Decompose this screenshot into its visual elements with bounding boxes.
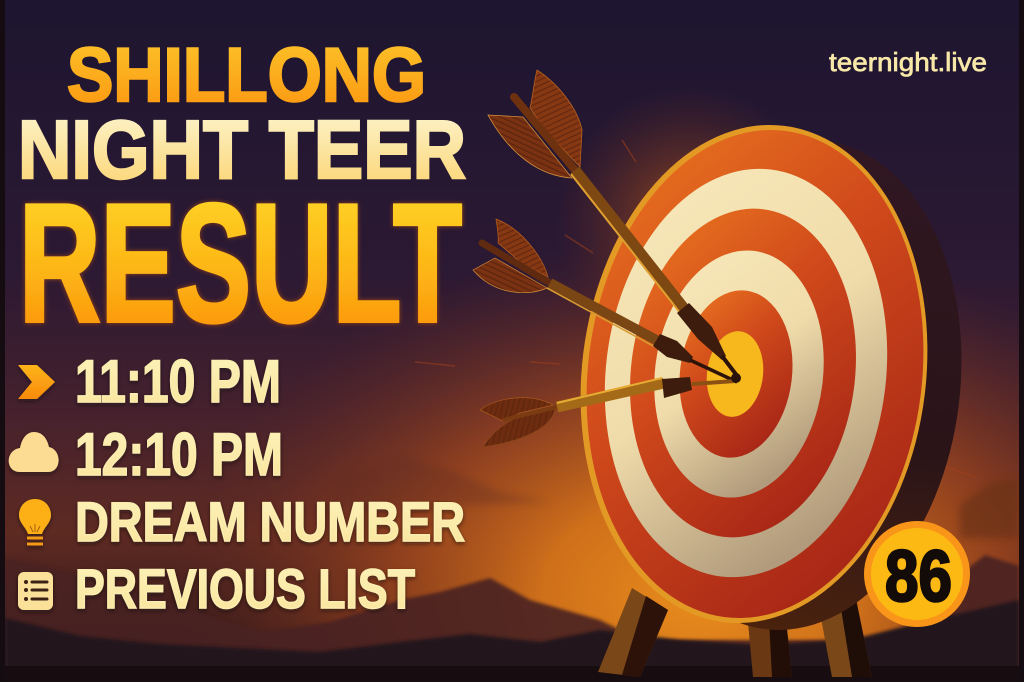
arrow: top bbox=[488, 70, 738, 377]
middle red ring bbox=[612, 196, 874, 550]
icon: chevron bbox=[18, 365, 55, 399]
label: 12:10 PM: 12:10 PM bbox=[75, 421, 283, 488]
label: PREVIOUS LIST: PREVIOUS LIST bbox=[75, 557, 415, 620]
gold rim bbox=[553, 105, 955, 643]
arrow: middle bbox=[473, 219, 737, 382]
outer red ring bbox=[559, 110, 951, 638]
board back side bbox=[601, 121, 989, 649]
title: Shillong Night Teer Result bbox=[18, 33, 466, 357]
heading line: SHILLONG: SHILLONG bbox=[67, 33, 426, 118]
inner cream ring bbox=[641, 241, 837, 507]
outer cream ring bbox=[582, 152, 910, 594]
menu list bbox=[9, 348, 465, 620]
label: DREAM NUMBER: DREAM NUMBER bbox=[75, 490, 465, 553]
icon: light bulb bbox=[19, 499, 51, 544]
stand legs bbox=[598, 560, 872, 677]
label: 11:10 PM: 11:10 PM bbox=[75, 348, 281, 415]
background: distant mountains bbox=[0, 456, 1024, 682]
heading line: NIGHT TEER: NIGHT TEER bbox=[18, 103, 466, 196]
target board bbox=[553, 105, 989, 649]
arrow: bottom bbox=[480, 373, 741, 447]
inner red ring bbox=[670, 284, 802, 464]
bullseye bbox=[702, 328, 768, 420]
number badge: 86: 86 bbox=[885, 537, 952, 617]
icon: cloud bbox=[9, 432, 59, 472]
number badge: 86 bbox=[864, 521, 970, 627]
heading line: RESULT: RESULT bbox=[19, 169, 462, 357]
icon: list bbox=[18, 572, 53, 610]
website label: teernight.live bbox=[829, 47, 987, 77]
